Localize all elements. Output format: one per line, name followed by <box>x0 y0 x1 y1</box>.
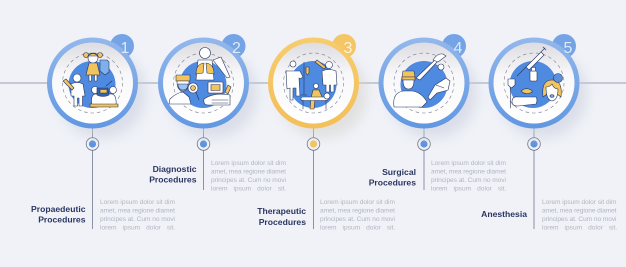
step 5: Anesthesia <box>481 34 617 232</box>
text block 4: amet, mea regione diamet <box>431 168 506 176</box>
text block 5: lorem ipsum dolor sit. <box>542 224 617 232</box>
circle badge 5: 5 <box>564 40 573 57</box>
text block 2: Lorem ipsum dolor sit dim <box>211 160 286 167</box>
stem and node 3 <box>307 126 320 229</box>
text block 3: lorem ipsum dolor sit. <box>320 224 395 232</box>
circle badge 2: 2 <box>232 40 241 57</box>
text block 4: principes at. Cum no movi <box>431 177 507 184</box>
heading 5: Anesthesia <box>481 209 527 219</box>
heading 2: Diagnostic <box>153 164 197 174</box>
text block 3: Lorem ipsum dolor sit dim <box>320 199 396 206</box>
circle badge 4 <box>378 34 477 138</box>
heading 4: Surgical <box>382 167 416 177</box>
text block 4: Lorem ipsum dolor sit dim <box>431 160 506 167</box>
circle badge 3 <box>268 34 367 138</box>
circle badge 3: 3 <box>344 40 353 57</box>
circle badge 2 <box>158 34 257 138</box>
step 4: Surgical Procedures <box>369 34 507 192</box>
heading 1: Procedures <box>38 214 86 224</box>
circle badge 1: 1 <box>121 40 130 57</box>
text block 5: amet, mea regione diamet <box>542 208 617 214</box>
text block 1: principes at. Cum no movi <box>100 216 176 223</box>
icon: children being examined <box>63 52 118 107</box>
text block 3: amet, mea regione diamet <box>320 208 395 214</box>
text block 3: principes at. Cum no movi <box>320 216 396 223</box>
circle badge 4: 4 <box>454 40 463 57</box>
icon: diagnostics, lungs, doctor and scan <box>169 48 231 105</box>
icon: surgeon and scalpel <box>394 54 450 107</box>
heading 4: Procedures <box>369 177 416 187</box>
heading 1: Propaedeutic <box>31 204 86 214</box>
step 2: Diagnostic Procedures <box>149 34 287 192</box>
stem and node 5 <box>528 126 540 229</box>
step 1: Propaedeutic Procedures <box>31 34 176 232</box>
text block 2: amet, mea regione diamet <box>211 168 286 176</box>
text block 1: Lorem ipsum dolor sit dim <box>100 199 176 206</box>
text block 1: amet, mea regione diamet <box>100 208 175 214</box>
heading 3: Therapeutic <box>257 206 306 216</box>
circle badge 5 <box>488 34 587 138</box>
stem and node 1 <box>86 126 99 229</box>
heading 2: Procedures <box>149 174 197 184</box>
text block 1: lorem ipsum dolor sit. <box>100 224 175 232</box>
text block 5: Lorem ipsum dolor sit dim <box>542 199 617 206</box>
stem and node 2 <box>197 126 210 190</box>
text block 4: lorem ipsum dolor sit. <box>431 186 506 192</box>
step 3: Therapeutic Procedures <box>257 34 396 232</box>
text block 2: principes at. Cum no movi <box>211 177 287 184</box>
icon: therapy, doctors and patient <box>286 60 337 109</box>
heading 3: Procedures <box>259 217 306 227</box>
icon: syringe, vial, IV and patient <box>508 47 562 108</box>
horizontal timeline line <box>0 82 626 84</box>
text block 2: lorem ipsum dolor sit. <box>211 186 286 192</box>
circle badge 1 <box>47 34 146 138</box>
stem and node 4 <box>418 126 430 190</box>
text block 5: principes at. Cum no movi <box>542 216 617 223</box>
